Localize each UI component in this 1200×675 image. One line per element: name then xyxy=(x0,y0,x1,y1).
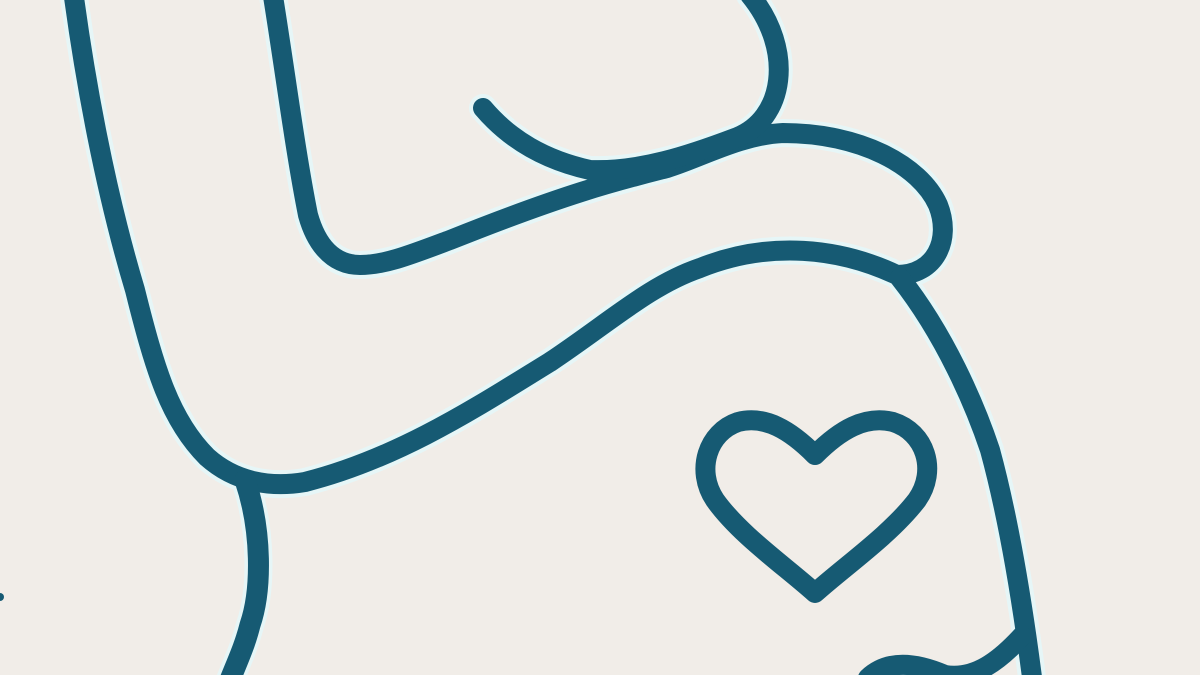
line art: breast xyxy=(483,0,779,170)
line art: belly xyxy=(900,278,1033,675)
line art: arm and back xyxy=(73,0,943,484)
line art: lower belly detail xyxy=(868,636,1022,675)
mark: edge dot xyxy=(0,593,4,601)
line art: lower back xyxy=(230,480,258,675)
halo around line art xyxy=(73,0,1033,675)
icon: heart xyxy=(705,420,927,593)
